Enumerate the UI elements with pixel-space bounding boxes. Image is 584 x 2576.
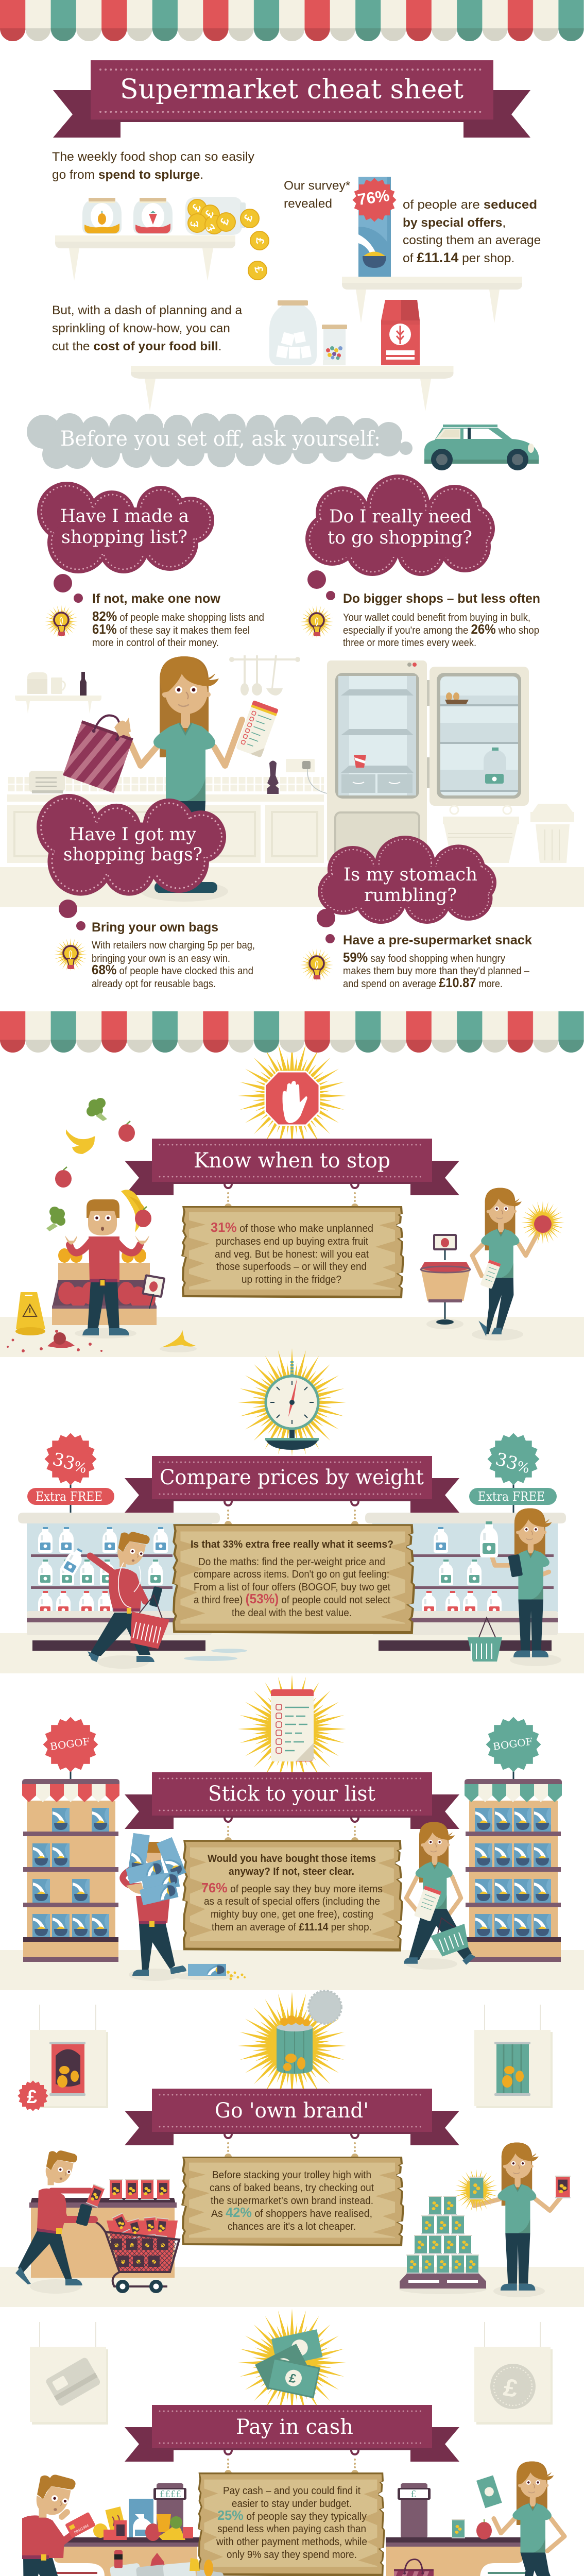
bags and baskets at checkout [53,2550,228,2576]
icon: pound badge: £ [27,2086,37,2107]
tip: bigger shops: three or more times every week. [343,637,476,649]
bubble heading: to go shopping? [328,528,472,548]
sunburst and checklist icon [216,1653,368,1805]
icon: green car [424,425,539,470]
sign text: As 42% of shoppers have realised, [211,2205,375,2220]
kitchen scene [0,655,584,907]
survey stat text: of people are seduced [403,198,535,212]
tip: make a list: 61% of these say it makes them feel [92,621,262,637]
banana peel [160,1330,197,1352]
shelf with jars and spilling coins: £ [203,222,217,234]
awning: top [0,0,584,41]
poster: teal own brand can [474,2005,553,2108]
sunburst and banknotes icon [216,2286,368,2439]
tip: make a list: If not, make one now [92,591,221,606]
text: cost of your food bill: But, with a dash of planning and a [52,303,243,317]
tip: bigger shops: Your wallet could benefit from buying in bulk, [343,612,530,623]
tip: bigger shops: especially if you're among the 26% who shop [343,621,543,637]
icon: stop sign with hand [265,1072,319,1125]
woman holding two cans [446,2143,571,2297]
cereal box with 76% badge: 76% [356,187,390,209]
striped gift bag [388,2560,439,2576]
woman comparing milk [468,1509,561,1666]
sunburst: stop [216,1020,368,1172]
sign text: cans of baked beans, try checking out [210,2182,374,2194]
wood sign: stick to your list [182,1840,403,1952]
tip: own bags: Bring your own bags [92,920,218,935]
tip: make a list: 82% of people make shopping lists and [92,608,276,624]
sunburst and banknotes icon: £ [288,2371,298,2386]
sign text: as a result of special offers (including the [204,1896,380,1907]
fallen cereal box [171,1964,246,1980]
bubble heading: Do I really need [329,506,472,527]
sign text: 25% of people say they typically [217,2507,369,2523]
intro text: spend to splurge: The weekly food shop can so easily [52,150,255,164]
poster: pound coin: £ [502,2374,520,2403]
sunburst and tin can icon [216,1970,368,2122]
ribbon: stick to your list [125,1772,459,1844]
wood sign: compare prices [172,1524,415,1634]
floor [0,867,584,907]
bubble heading: Have I got my [69,824,196,845]
sign text: From a list of four offers (BOGOF, buy two get [194,1582,390,1593]
33% extra free red badge: Extra FREE [36,1489,102,1504]
poster: pound coin [474,2322,553,2425]
heading: Compare prices by weight [160,1466,424,1489]
right checkout [386,2483,523,2576]
sign text: spend less when paying cash than [217,2523,366,2535]
shelf with jars and spilling coins: £ [217,216,232,227]
grey cloud heading [27,413,413,469]
tip: own bags: With retailers now charging 5p per bag, [92,940,255,951]
small wall shelf with mugs [15,672,101,714]
sign text: 76% of people say they buy more items [201,1880,387,1895]
survey text: revealed [284,197,332,211]
awning: middle [0,1011,584,1053]
sign text: with other payment methods, while [216,2536,367,2548]
know when to stop: floor [0,1317,584,1357]
tip: own bags [47,920,255,990]
ribbon: pay in cash [125,2405,459,2477]
shelf with jars and spilling coins: £ [190,201,204,213]
33% extra free teal badge [469,1433,557,1505]
sign text: mighty buy one, get one free), costing [211,1909,373,1920]
survey stat text: costing them an average [403,233,541,247]
left checkout with groceries: ££££ [160,2489,181,2500]
title text: Supermarket cheat sheet [120,74,463,105]
compare prices floor [0,1633,584,1673]
right shelf unit with BOGOF badge: BOGOF [492,1736,534,1753]
sign text: those superfoods – or will they end [216,1261,367,1273]
falling fruit and vegetables [46,1098,151,1232]
sunburst and scales icon [216,1326,368,1479]
right checkout: £ [410,2489,416,2500]
man comparing milk [60,1532,174,1669]
shelf with jars and spilling coins: £ [241,212,255,223]
33% extra free teal badge: 33% [493,1449,533,1478]
wood sign: know when to stop [181,1206,404,1298]
sign text: Before stacking your trolley high with [212,2170,371,2181]
sign text: up rotting in the fridge? [242,1274,341,1285]
woman paying with cash [476,2462,564,2576]
wood sign: pay in cash [198,2472,385,2576]
heading: Stick to your list [208,1782,375,1806]
cereal box with 76% badge [352,177,397,277]
text: cost of your food bill: sprinkling of know-how, you can [52,321,230,335]
woman walking with basket [404,1822,475,1970]
tip: own bags: bringing your own is an easy win. [92,953,230,964]
shopping list [236,700,279,758]
tip: snack: 59% say food shopping when hungry [343,950,516,965]
right shelf unit with BOGOF badge [465,1717,562,1962]
right milk shelves [365,1484,566,1651]
man with credit card [21,2475,96,2576]
left shelf unit with BOGOF badge: BOGOF [49,1736,91,1753]
survey stat text: by special offers, [403,216,506,230]
sign text: anyway? If not, steer clear. [229,1866,354,1877]
tip: snack: makes them buy more than they'd planned – [343,965,530,977]
title ribbon [53,60,530,138]
bin and basket [443,804,574,863]
intro text: spend to splurge: go from spend to splurge. [52,168,203,182]
ribbon: compare prices [125,1456,459,1528]
heading: Know when to stop [194,1149,390,1173]
groceries on belt [93,2499,193,2541]
shelf with jars and spilling coins: £ [253,238,267,245]
ribbon: go own brand [125,2089,459,2161]
stacked can pyramid on pallet [399,2196,487,2294]
icon: pound badge [18,2080,48,2111]
sign text: chances are it's a lot cheaper. [228,2221,356,2232]
bubble heading: Is my stomach [343,865,477,885]
toaster [29,771,65,793]
tip: own bags: already opt for reusable bags. [92,978,216,990]
tip: make a list [38,591,264,649]
tip: bigger shops [294,591,540,649]
left shelf unit with BOGOF badge [22,1717,119,1962]
bubble heading: rumbling? [364,885,457,906]
tip: snack [294,933,532,990]
bubble heading: shopping bags? [63,844,202,865]
33% extra free red badge: 33% [50,1449,90,1478]
survey stat text: of £11.14 per shop. [403,250,514,265]
stick to your list floor [0,1950,584,1990]
tip: snack: Have a pre-supermarket snack [343,933,532,947]
sign text: easier to stay under budget. [232,2498,352,2510]
tip: make a list: more in control of their money. [92,637,219,649]
sign text: a third free) (53%) of people could not select [194,1591,399,1606]
sign text: the supermarket's own brand instead. [211,2195,373,2207]
teal basket [488,2572,527,2576]
sign text: them an average of £11.14 per shop. [212,1922,374,1933]
man with credit card: 09011984 [74,2524,90,2535]
tip: own bags: 68% of people have clocked this and [92,962,264,977]
33% extra free red badge [27,1433,114,1505]
sign text: and veg. But be honest: will you eat [215,1249,369,1260]
sign text: Do the maths: find the per-weight price and [198,1556,385,1568]
shopping bag [63,707,138,793]
bubble heading: Have I made a [60,506,189,527]
shelf with jars and spilling coins: £ [202,208,217,219]
thought bubble: shopping list [41,486,210,603]
pepper mill [267,760,279,794]
thought bubble: stomach [317,839,492,943]
sign text: only 9% say they spend more. [227,2549,357,2561]
shelf with sugar jar, sweets jar and carton [131,300,453,411]
shelf under cereal box [342,277,522,323]
sign text: compare across items. Don't go on gut feeling: [194,1569,389,1580]
heading: Go 'own brand' [215,2099,369,2123]
open fridge [327,660,529,863]
woman with apple [472,1188,573,1341]
thought bubble: need to go shopping [307,479,491,600]
survey text: Our survey* [284,179,351,193]
left checkout with groceries [54,2483,199,2576]
text: cost of your food bill: cut the cost of your food bill. [52,340,221,353]
poster: red baked beans [18,2005,108,2111]
sign text: the deal with the best value. [232,1607,352,1619]
tip: bigger shops: Do bigger shops – but less often [343,591,540,606]
trolley full of cans [94,2213,179,2293]
thought bubble: shopping bags [41,799,222,930]
puddles [184,1649,247,1661]
apple barrel with sign [421,1234,470,1329]
heading: Pay in cash [236,2415,353,2439]
sign text: 31% of those who make unplanned [211,1219,377,1235]
woman with bag and list [63,656,279,902]
heading: before you set off: Before you set off, ask yourself: [60,427,381,451]
sign text: Pay cash – and you could find it [223,2485,360,2497]
man pushing trolley [15,2150,105,2294]
33% extra free teal badge: Extra FREE [478,1489,545,1504]
tip: snack: and spend on average £10.87 more. [343,975,505,990]
ribbon: know when to stop [125,1139,459,1211]
man carrying cereal boxes [123,1833,186,1981]
left milk shelves [18,1484,220,1651]
wall socket [286,759,327,793]
man at fruit stall [52,1199,165,1338]
shelf with jars and spilling coins: £ [188,221,201,227]
sign text: purchases end up buying extra fruit [216,1236,368,1247]
poster: credit card [30,2322,108,2425]
shelf with jars and spilling coins: £ [252,265,266,275]
shelf with jars and spilling coins [55,197,269,281]
own brand floor [0,2267,584,2307]
sign text: Would you have bought those items [208,1853,376,1865]
wet floor cone and spill [7,1292,102,1352]
counter with cans [29,2179,177,2278]
hanging utensils [229,655,300,696]
wood sign: own brand [181,2157,404,2246]
bubble heading: shopping list? [61,527,187,548]
sign text: Is that 33% extra free really what it seems? [191,1539,393,1550]
